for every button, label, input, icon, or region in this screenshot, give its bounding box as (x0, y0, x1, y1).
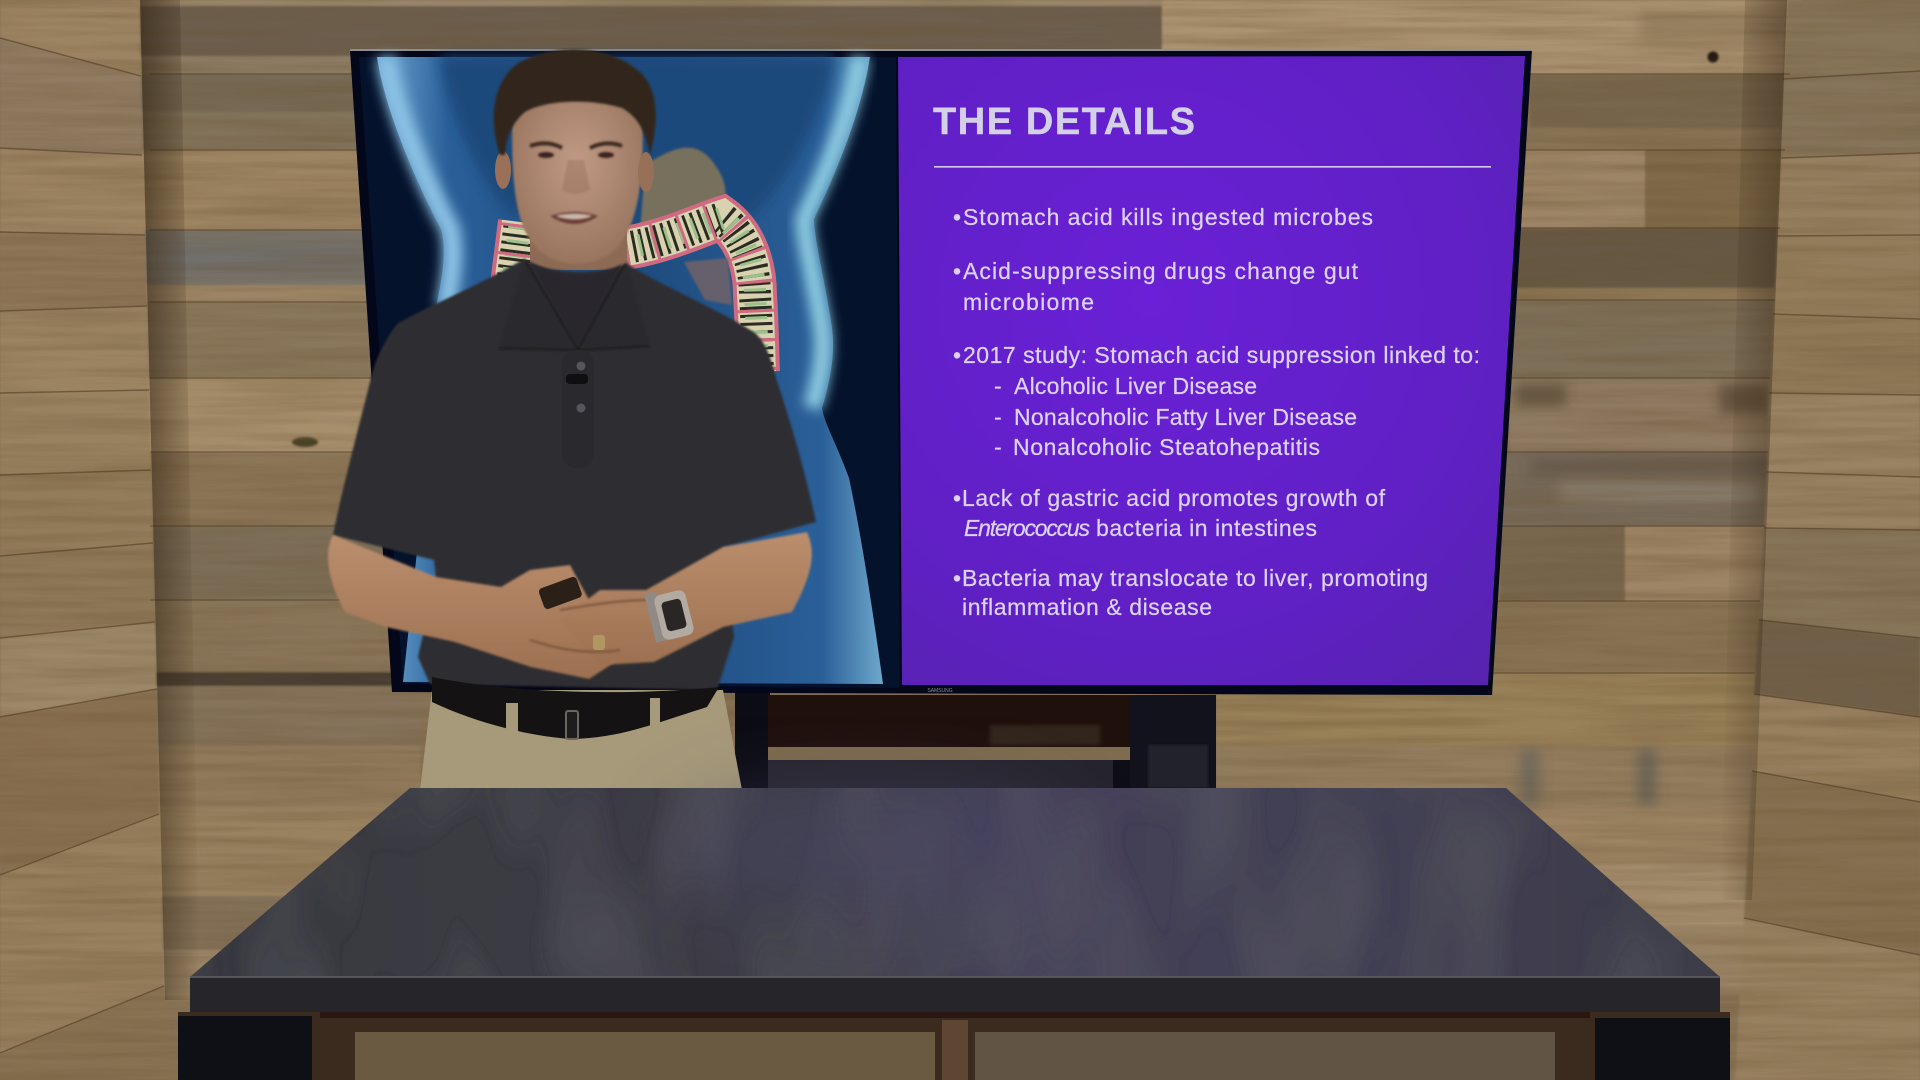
bullet: 2017 study with sub-list: • (953, 342, 961, 368)
left forearm (328, 535, 615, 679)
slide image: anatomy of torso and intestines (359, 57, 900, 688)
bullet: 2017 study with sub-list: Alcoholic Liver Disease (1014, 373, 1257, 399)
neck (530, 215, 627, 270)
bullet: gastric acid (953, 485, 1386, 541)
bullet: bacteria translocate: inflammation & disease (962, 594, 1212, 620)
right side wall: angled planks (1735, 0, 1920, 1080)
bullet: 2017 study with sub-list: 2017 study: Stomach acid suppression linked to: (963, 342, 1480, 368)
polo shirt (333, 259, 816, 690)
knots (292, 52, 1718, 447)
wristwatch (644, 589, 695, 643)
slide panel: the details (898, 56, 1525, 685)
bullet: acid-suppressing drugs: Acid-suppressing drugs change gut (963, 258, 1359, 284)
left drawer (355, 1032, 935, 1080)
stomach (640, 148, 726, 232)
bullet: bacteria translocate: Bacteria may translocate to liver, promoting (962, 565, 1428, 591)
bullet: gastric acid: Lack of gastric acid promotes growth of (962, 485, 1386, 511)
bullet: 2017 study with sub-list: - (994, 434, 1002, 460)
bullet: 2017 study with sub-list: Nonalcoholic Fatty Liver Disease (1014, 404, 1357, 430)
ring (593, 635, 605, 650)
large intestine (512, 218, 758, 372)
upper body shading (440, 57, 835, 225)
belt buckle and loops (506, 698, 660, 749)
left side wall: angled planks (0, 0, 178, 1080)
head and hair (494, 49, 656, 264)
cabinet under table with drawers and legs (178, 1012, 1730, 1080)
trousers (420, 690, 742, 790)
finger shading (530, 600, 650, 652)
bullet: 2017 study with sub-list (953, 342, 1480, 460)
table top (190, 788, 1720, 1013)
organ below colon (684, 258, 732, 305)
heading rule (934, 166, 1491, 168)
bullet: acid-suppressing drugs: • (953, 258, 961, 284)
placket and buttons (562, 350, 594, 468)
body silhouette (377, 57, 883, 684)
table front edge (190, 977, 1720, 1013)
presenter (328, 49, 816, 790)
facial features (530, 143, 622, 224)
right rim glow (804, 57, 860, 408)
bullet: gastric acid: • (953, 485, 961, 511)
center post (942, 1020, 968, 1080)
bullet: 2017 study with sub-list: - (994, 373, 1002, 399)
bullet: bacteria translocate: • (953, 565, 961, 591)
belt (432, 677, 719, 739)
bullet: bacteria translocate (953, 565, 1428, 620)
remote in hand (538, 576, 583, 610)
right forearm and hand (560, 532, 812, 665)
left rim glow on body edge (386, 57, 453, 308)
heading: THE DETAILS (933, 101, 1195, 143)
bullet: stomach acid: Stomach acid kills ingested microbes (963, 204, 1373, 230)
bullet: gastric acid: bacteria in intestines (1096, 515, 1317, 541)
TV stand and shelf behind the table (735, 690, 1216, 790)
bullet: gastric acid: Enterococcus (964, 515, 1090, 541)
manufacturer label: SAMSUNG (927, 688, 953, 694)
bullet: 2017 study with sub-list: - (994, 404, 1002, 430)
shirt collar (499, 259, 650, 350)
bullet: stomach acid: • (953, 204, 961, 230)
bullet: 2017 study with sub-list: Nonalcoholic Steatohepatitis (1013, 434, 1320, 460)
left leg (178, 1016, 312, 1080)
bullet: acid-suppressing drugs (953, 258, 1359, 315)
right drawer (975, 1032, 1555, 1080)
right leg (1595, 1018, 1730, 1080)
bullet: acid-suppressing drugs: microbiome (963, 289, 1094, 315)
